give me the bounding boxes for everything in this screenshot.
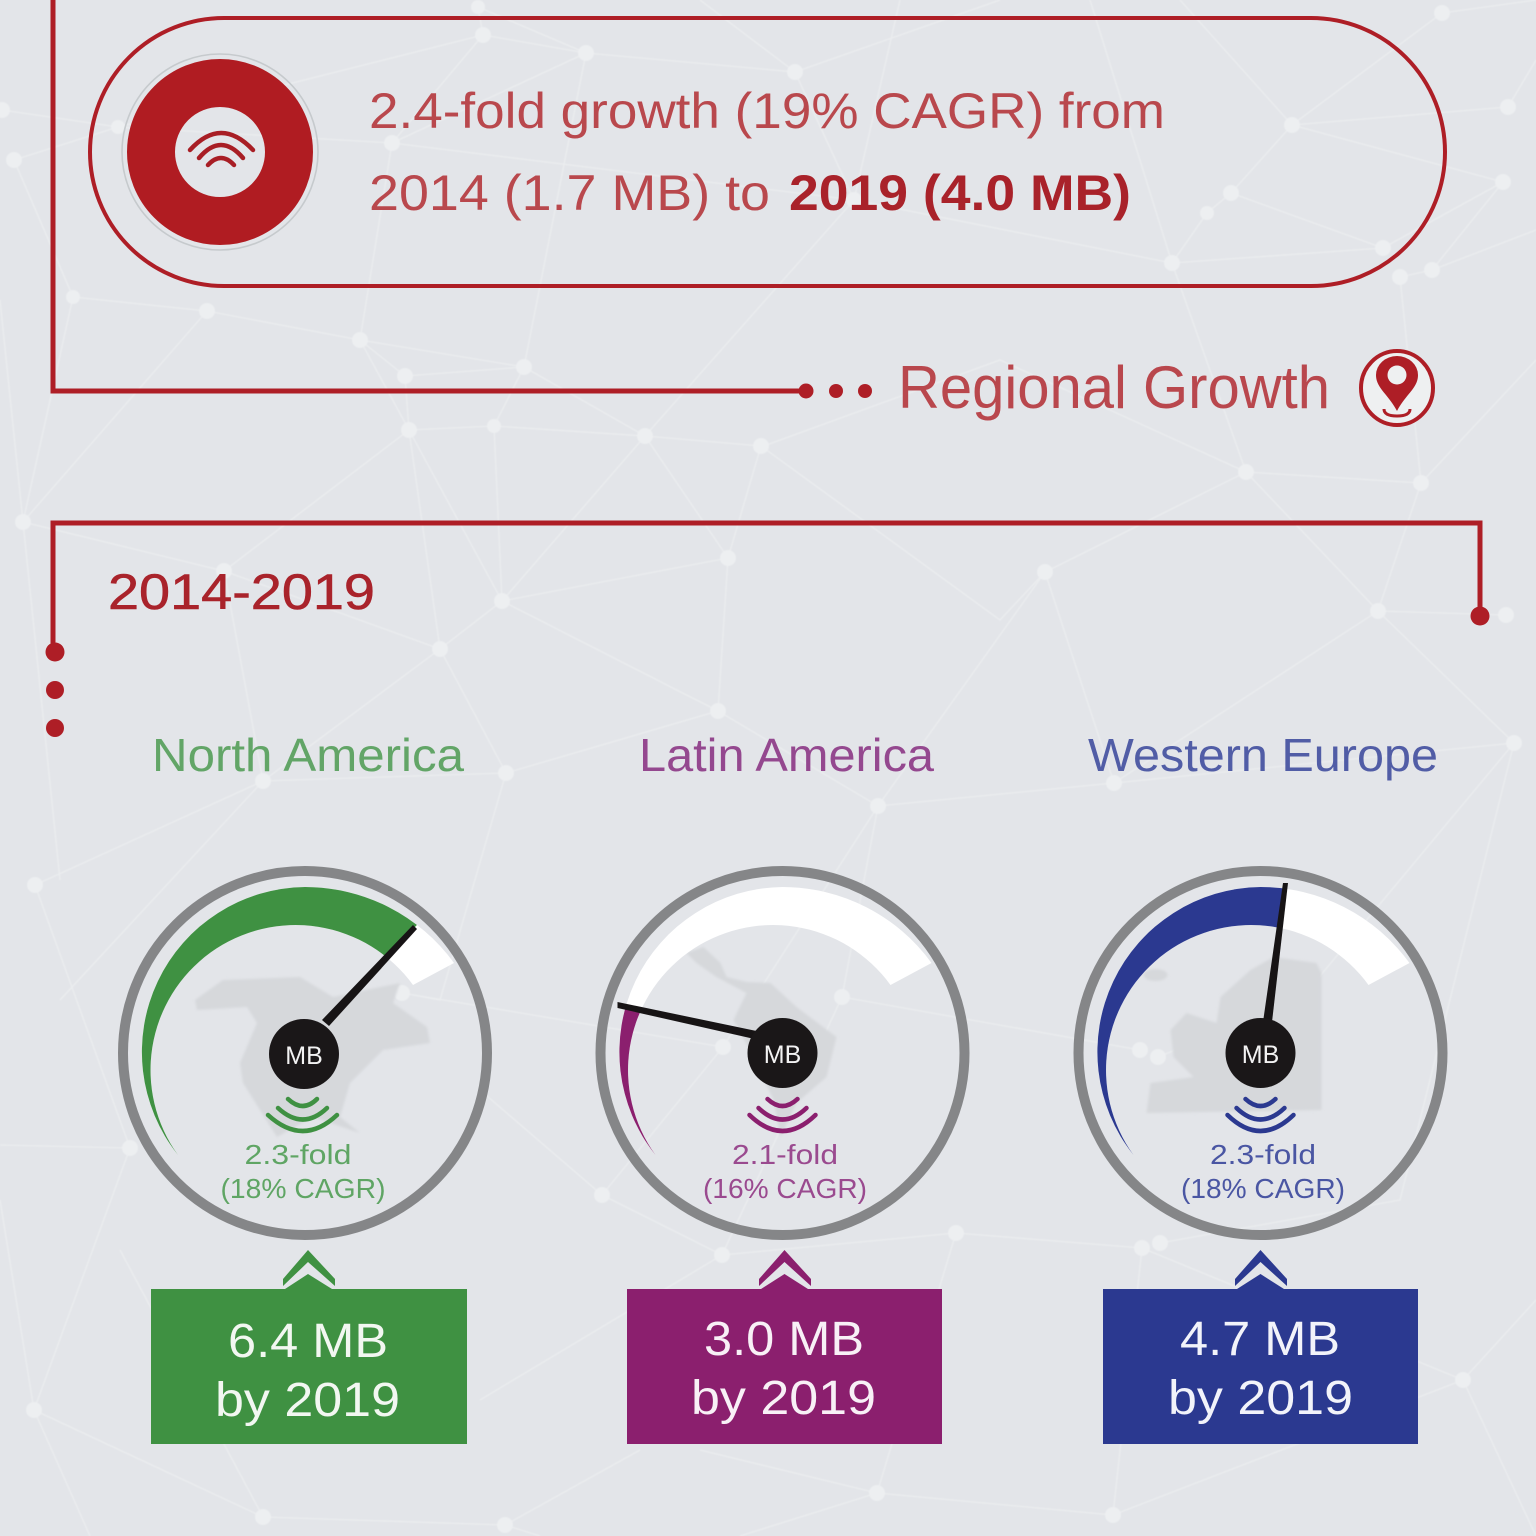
heading: Latin America: Latin America [639,729,934,781]
callout: 3.0 MB by 2019: by 2019 [691,1372,876,1425]
gauge: Western Europe [1078,871,1442,1235]
gauge: Western Europe: MB [1242,1041,1279,1069]
gauge: Latin America [600,871,964,1235]
map: Latin America [686,947,836,1137]
text: global growth statement: 2019 (4.0 MB) [789,165,1131,221]
gauge: North America: MB [285,1042,323,1070]
map: Western Europe [1144,957,1322,1113]
text: global growth statement: 2014 (1.7 MB) to [369,165,770,221]
map: North America [195,977,430,1137]
gauge: Western Europe: 2.3-fold [1210,1139,1316,1170]
connector line: top section to Regional Growth [53,0,872,398]
gauge: Latin America: (16% CAGR) [703,1173,867,1204]
callout: 6.4 MB by 2019: by 2019 [215,1374,400,1427]
panel: global growth pill [90,18,1445,286]
section frame: 2014-2019 [46,523,1490,737]
callout: 3.0 MB by 2019 [627,1250,942,1444]
callout: 4.7 MB by 2019: 4.7 MB [1180,1313,1340,1366]
panel: Western Europe [1078,729,1442,1444]
gauge: Western Europe: (18% CAGR) [1181,1173,1345,1204]
heading: North America: North America [152,729,464,781]
gauge: North America [123,871,487,1235]
heading: Western Europe: Western Europe [1088,729,1438,781]
gauge: Latin America: 2.1-fold [732,1139,838,1170]
heading: Regional Growth: Regional Growth [898,354,1330,421]
panel: Latin America [600,729,964,1444]
callout: 6.4 MB by 2019 [151,1250,467,1444]
text: global growth statement: 2.4-fold growth (19% CAGR) from [369,83,1165,139]
panel: North America [123,729,487,1444]
text: global growth statement [369,83,1165,221]
icon: red wifi disc [122,54,318,250]
callout: 4.7 MB by 2019: by 2019 [1168,1372,1353,1425]
gauge: North America: 2.3-fold [244,1139,352,1170]
callout: 4.7 MB by 2019 [1103,1250,1418,1444]
heading: 2014-2019: 2014-2019 [108,564,375,620]
gauge: North America: (18% CAGR) [220,1173,386,1204]
icon: location pin [1361,351,1433,425]
callout: 3.0 MB by 2019: 3.0 MB [704,1313,864,1366]
callout: 6.4 MB by 2019: 6.4 MB [228,1315,388,1368]
gauge: Latin America: MB [764,1041,801,1069]
